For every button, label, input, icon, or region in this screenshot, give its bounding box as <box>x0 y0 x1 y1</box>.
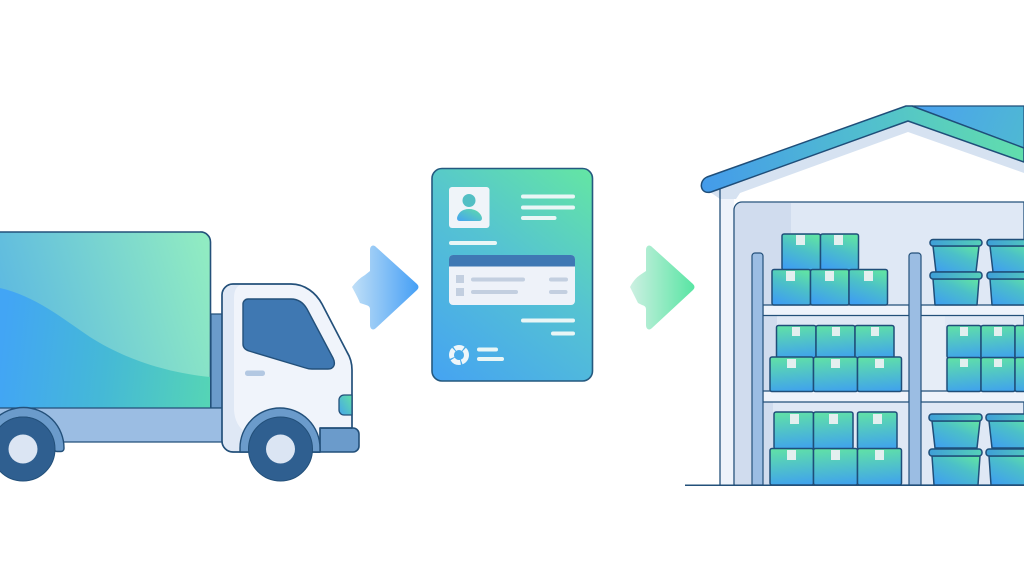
chassis <box>0 408 223 442</box>
boxes: bottom shelf <box>770 412 902 485</box>
arrow: green <box>630 246 694 329</box>
info table <box>449 255 575 305</box>
boxes: top shelf <box>772 234 888 305</box>
cab window <box>243 299 334 369</box>
tubs: bottom shelf <box>929 414 1024 485</box>
outer wall <box>710 120 1024 485</box>
shelf boards <box>763 305 1024 402</box>
logo seal <box>452 348 466 362</box>
truck cargo box <box>0 232 211 408</box>
rear wheel <box>0 408 64 481</box>
tubs: top shelf <box>930 240 1024 305</box>
ground line <box>685 484 1024 486</box>
door handle <box>245 370 265 376</box>
footer text lines <box>477 318 575 361</box>
truck <box>0 232 359 481</box>
boxes: middle shelf <box>770 326 1024 392</box>
header text lines <box>449 194 575 245</box>
document card <box>432 168 592 381</box>
front wheel <box>240 408 320 481</box>
card background <box>432 168 592 381</box>
headlight <box>339 395 352 415</box>
cab connector <box>211 314 223 408</box>
interior <box>734 202 1024 485</box>
arrow: blue <box>352 246 418 329</box>
front bumper <box>310 428 359 452</box>
roof <box>701 106 1024 192</box>
warehouse <box>685 106 1024 486</box>
profile photo <box>449 187 490 228</box>
box label tabs <box>786 235 1002 460</box>
shelf uprights <box>752 253 921 485</box>
truck cab <box>222 284 352 452</box>
